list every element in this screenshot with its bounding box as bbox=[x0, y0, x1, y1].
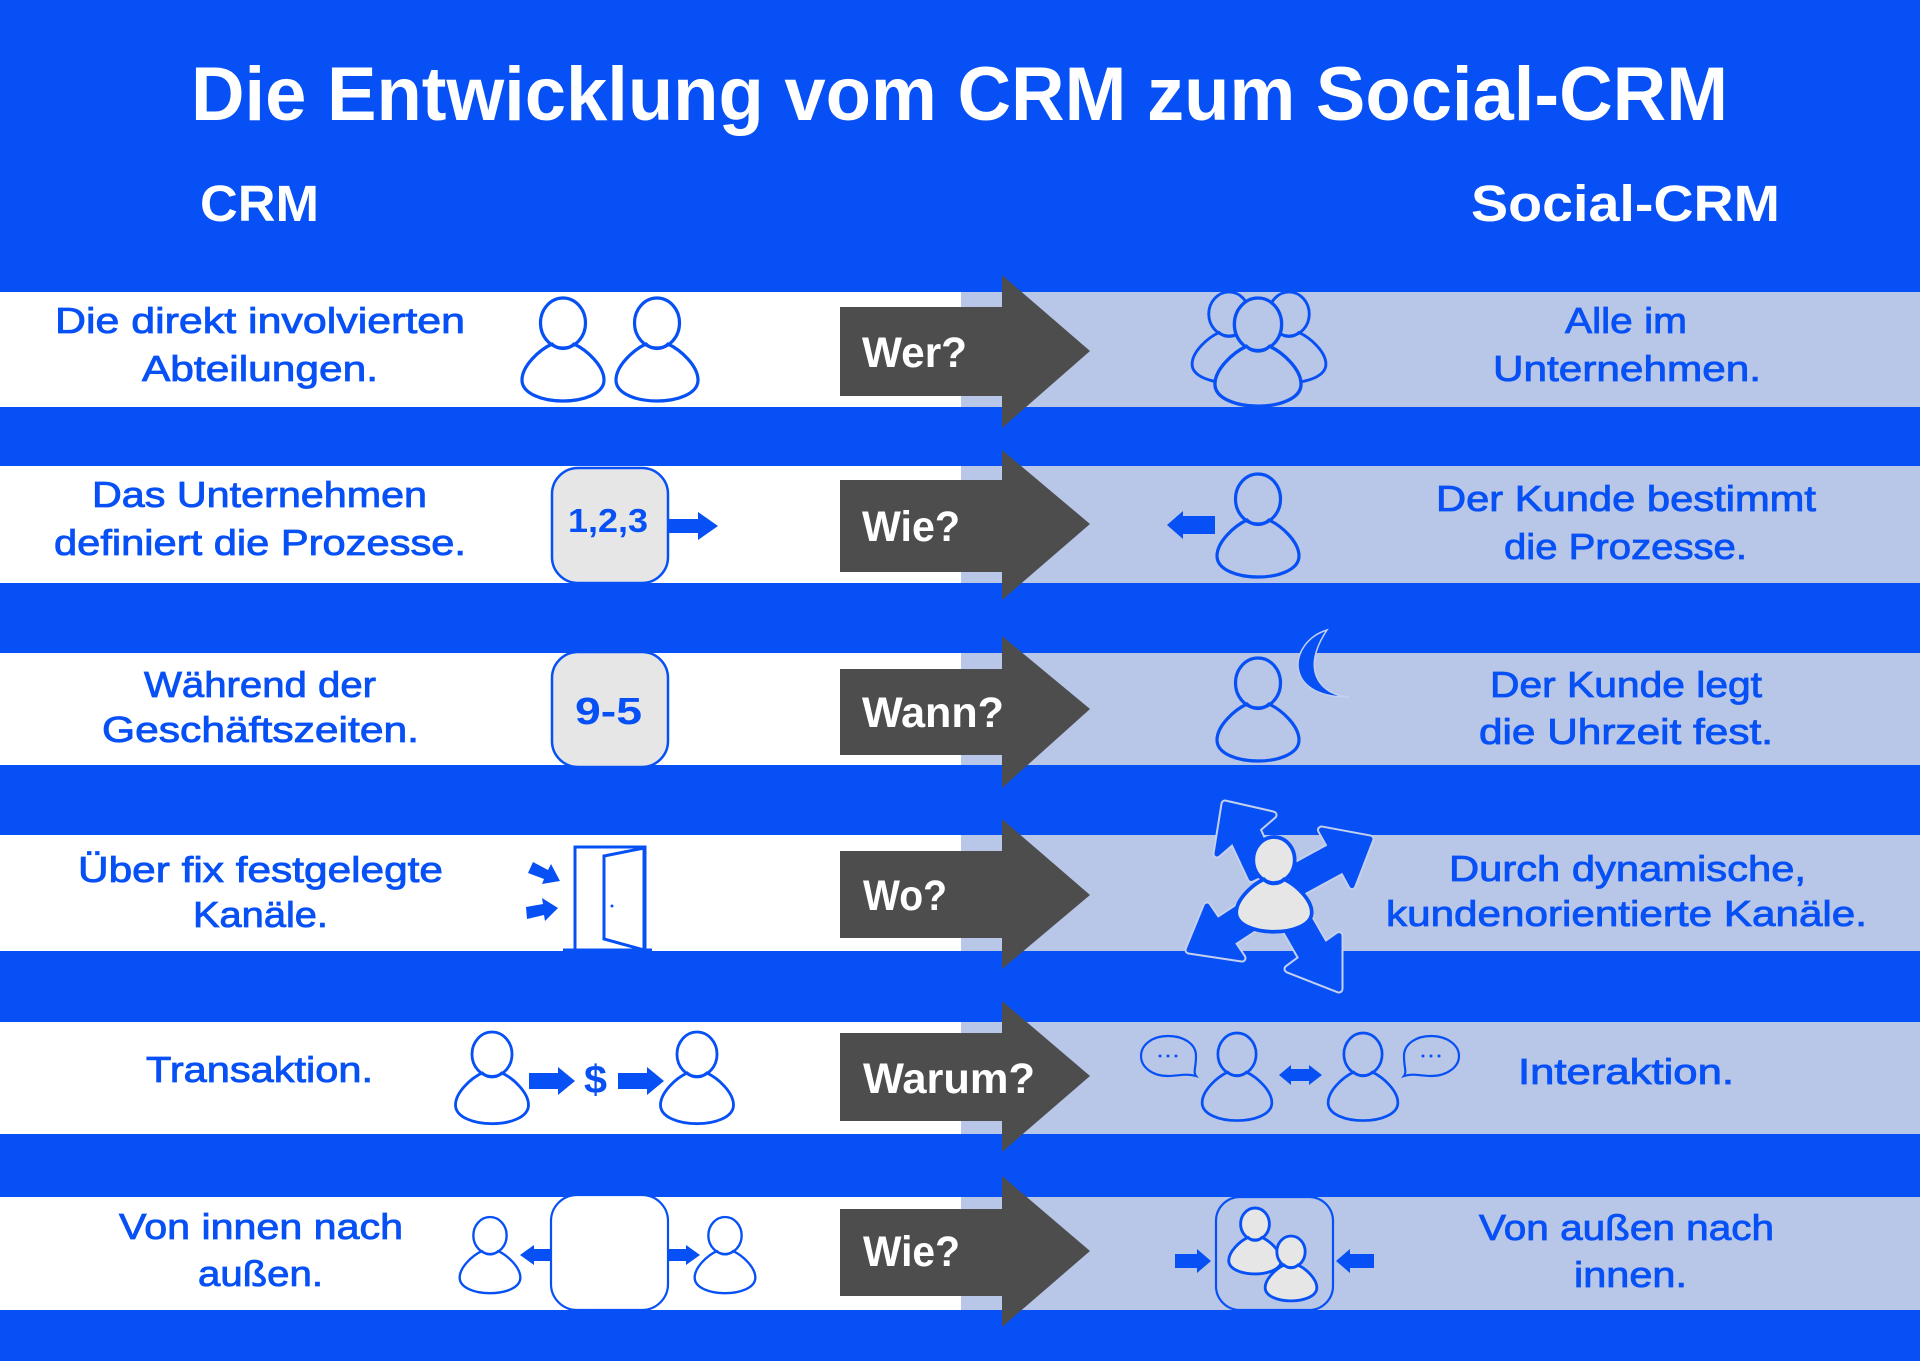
column heading: Social-CRM: Social-CRM bbox=[1471, 175, 1780, 232]
icon: transaction: $ bbox=[584, 1058, 607, 1102]
Social-CRM text: Von außen nach bbox=[1479, 1207, 1774, 1248]
icon: inside out bbox=[460, 1195, 755, 1310]
band right bbox=[961, 835, 1920, 951]
icon: two people bbox=[522, 298, 698, 401]
arrow: Wie? bbox=[840, 1176, 1090, 1327]
icon: group of people bbox=[1192, 292, 1326, 406]
icon: business hours box bbox=[552, 652, 668, 767]
band left bbox=[0, 653, 961, 765]
Social-CRM text: innen. bbox=[1574, 1254, 1687, 1295]
arrow: Wer? bbox=[840, 275, 1090, 428]
arrow: Wo?: Wo? bbox=[863, 872, 947, 920]
Social-CRM text: Durch dynamische, bbox=[1449, 848, 1806, 889]
CRM text: Geschäftszeiten. bbox=[102, 709, 419, 750]
band right bbox=[961, 292, 1920, 407]
Social-CRM text: die Uhrzeit fest. bbox=[1479, 711, 1773, 752]
Social-CRM text: kundenorientierte Kanäle. bbox=[1386, 893, 1867, 934]
band right bbox=[961, 1022, 1920, 1134]
column heading: CRM: CRM bbox=[200, 175, 319, 232]
CRM text: definiert die Prozesse. bbox=[54, 522, 466, 563]
arrow: Wann?: Wann? bbox=[862, 689, 1004, 737]
CRM text: Über fix festgelegte bbox=[78, 849, 443, 890]
Social-CRM text: Unternehmen. bbox=[1493, 348, 1761, 389]
arrow: Wann? bbox=[840, 636, 1090, 788]
Social-CRM text: Der Kunde bestimmt bbox=[1436, 478, 1816, 519]
Social-CRM text bbox=[1436, 478, 1816, 567]
row 5: Warum bbox=[0, 1001, 1920, 1152]
Social-CRM text: Interaktion. bbox=[1518, 1051, 1734, 1092]
Social-CRM text bbox=[1479, 664, 1773, 752]
CRM text: Die direkt involvierten bbox=[55, 300, 465, 341]
icon: interaction bbox=[1141, 1033, 1459, 1121]
Social-CRM text bbox=[1386, 848, 1867, 934]
CRM text: Transaktion. bbox=[146, 1049, 373, 1090]
band left bbox=[0, 1197, 961, 1310]
Social-CRM text: Alle im bbox=[1565, 300, 1687, 341]
icon: door with arrows bbox=[526, 847, 652, 950]
CRM text bbox=[78, 849, 443, 935]
row 3: Wann bbox=[0, 630, 1920, 788]
icon: process box: 1,2,3 bbox=[568, 502, 648, 539]
icon: process box bbox=[552, 468, 718, 583]
CRM text: Während der bbox=[144, 664, 376, 705]
CRM text: Das Unternehmen bbox=[92, 474, 427, 515]
title: Die Entwicklung vom CRM zum Social-CRM bbox=[191, 52, 1728, 137]
Social-CRM text: die Prozesse. bbox=[1504, 526, 1747, 567]
CRM text: außen. bbox=[198, 1253, 323, 1294]
icon: customer with moon bbox=[1217, 630, 1349, 761]
band left bbox=[0, 466, 961, 583]
Social-CRM text: Der Kunde legt bbox=[1490, 664, 1762, 705]
row 6: Wie bbox=[0, 1176, 1920, 1327]
arrow: Warum?: Warum? bbox=[863, 1055, 1035, 1103]
CRM text: Kanäle. bbox=[193, 894, 328, 935]
icon: business hours box: 9-5 bbox=[575, 691, 642, 733]
Social-CRM text bbox=[1493, 300, 1761, 389]
row 2: Wie bbox=[0, 450, 1920, 600]
icon: transaction bbox=[456, 1032, 733, 1124]
band left bbox=[0, 835, 961, 951]
arrow: Wie? bbox=[840, 450, 1090, 600]
row 1: Wer bbox=[0, 275, 1920, 428]
arrow: Wer?: Wer? bbox=[862, 329, 967, 377]
band right bbox=[961, 466, 1920, 583]
CRM text bbox=[54, 474, 466, 563]
arrow: Wo? bbox=[840, 819, 1090, 969]
icon: customer with arrow bbox=[1167, 474, 1299, 577]
CRM text bbox=[119, 1206, 403, 1294]
band right bbox=[961, 653, 1920, 765]
band right bbox=[961, 1197, 1920, 1310]
icon: outside in bbox=[1175, 1197, 1374, 1310]
CRM text bbox=[102, 664, 419, 750]
band left bbox=[0, 292, 961, 407]
CRM text: Von innen nach bbox=[119, 1206, 403, 1247]
row 4: Wo bbox=[0, 804, 1920, 989]
arrow: Wie?: Wie? bbox=[862, 503, 960, 551]
arrow: Warum? bbox=[840, 1001, 1090, 1152]
CRM text: Abteilungen. bbox=[142, 348, 378, 389]
arrow: Wie?: Wie? bbox=[863, 1228, 960, 1276]
Social-CRM text bbox=[1479, 1207, 1774, 1295]
icon: customer with arrows in all directions bbox=[1189, 804, 1370, 989]
CRM text bbox=[55, 300, 465, 389]
band left bbox=[0, 1022, 961, 1134]
